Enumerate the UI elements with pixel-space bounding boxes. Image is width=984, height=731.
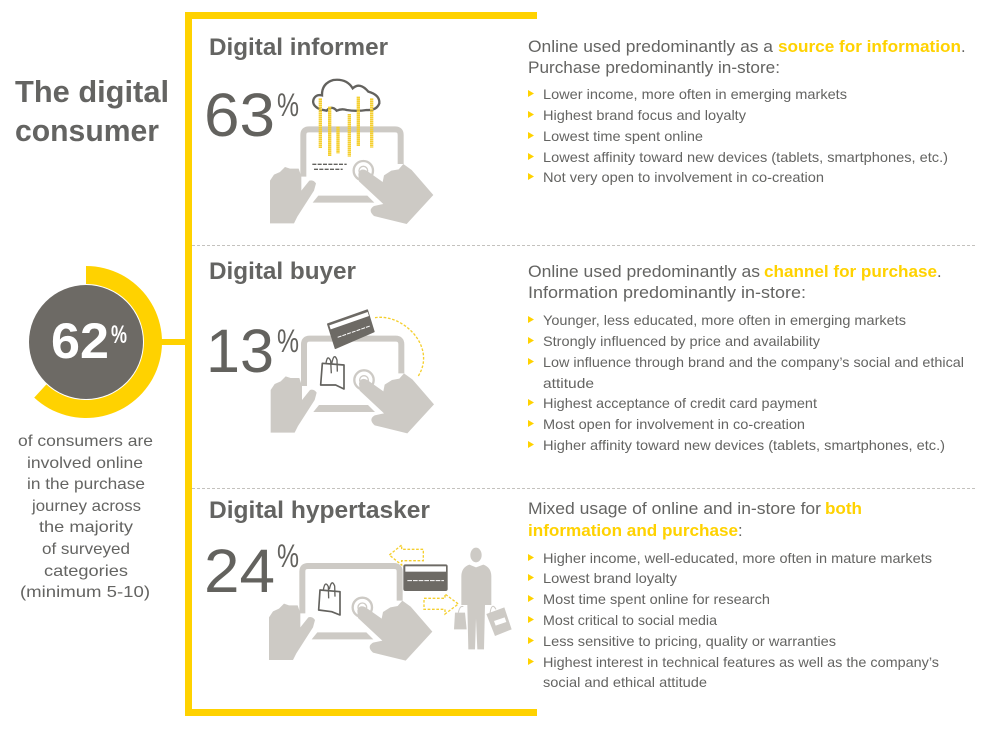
text: hypertasker description: :	[738, 522, 743, 540]
list: hypertasker traits: Most time spent online for research	[543, 591, 770, 607]
text: informer description: source for information	[778, 38, 961, 56]
statistic: 63%: %	[277, 87, 299, 123]
donut chart: 62%: 62	[51, 313, 109, 369]
text: informer description	[528, 38, 966, 77]
donut chart: 62%	[29, 266, 162, 418]
panel: digital buyer	[206, 258, 964, 453]
text: informer description: Purchase predominantly in-store:	[528, 59, 780, 77]
statistic: 13%: %	[277, 323, 299, 359]
heading: digital buyer: Digital buyer	[209, 258, 356, 285]
text: hypertasker description	[528, 500, 862, 540]
statistic: 63%: 63	[204, 81, 275, 149]
title	[15, 74, 169, 148]
statistic: 24%: %	[277, 538, 299, 574]
list: buyer traits: Younger, less educated, more often in emerging markets	[543, 312, 906, 328]
text: informer description: .	[961, 38, 966, 56]
text block: 62% description: (minimum 5-10)	[20, 584, 150, 601]
list: informer traits: Lowest time spent online	[543, 128, 703, 144]
text block: 62% description: of surveyed	[42, 541, 130, 558]
title: The digital	[15, 74, 169, 109]
panel: digital hypertasker	[204, 497, 939, 690]
text block: 62% description: in the purchase	[27, 476, 145, 493]
statistic: 24%: 24	[204, 537, 275, 605]
donut chart: 62%: %	[111, 321, 127, 349]
text block: 62% description	[18, 433, 153, 601]
icon: tablet with card and bag	[271, 310, 434, 433]
text block: 62% description: categories	[44, 563, 128, 580]
text: buyer description: .	[937, 263, 942, 281]
list: informer traits: Not very open to involvement in co-creation	[543, 169, 824, 185]
list: informer traits: Highest brand focus and loyalty	[543, 107, 746, 123]
icon: tablet, card, arrows and shopper	[269, 545, 512, 661]
list: buyer traits: Highest acceptance of credit card payment	[543, 395, 817, 411]
connector from donut to frame	[160, 339, 187, 345]
list: buyer traits: Low influence through brand and the company’s social and ethical	[543, 354, 964, 370]
text: buyer description	[528, 263, 942, 302]
list: hypertasker traits: Higher income, well-educated, more often in mature markets	[543, 550, 932, 566]
list: buyer traits: Higher affinity toward new devices (tablets, smartphones, etc.)	[543, 437, 945, 453]
text: hypertasker description: both	[825, 500, 862, 518]
text: buyer description: channel for purchase	[764, 263, 937, 281]
list: informer traits	[528, 86, 948, 185]
list: hypertasker traits: Less sensitive to pricing, quality or warranties	[543, 633, 836, 649]
heading: digital hypertasker: Digital hypertasker	[209, 497, 430, 524]
list: buyer traits: attitude	[543, 375, 594, 391]
icon: tablet with cloud	[270, 80, 433, 224]
title: consumer	[15, 113, 159, 148]
text block: 62% description: involved online	[27, 455, 143, 472]
heading: digital informer: Digital informer	[209, 34, 388, 61]
text: informer description: Online used predominantly as a	[528, 38, 774, 56]
list: hypertasker traits: Lowest brand loyalty	[543, 570, 677, 586]
text: hypertasker description: information and purchase	[528, 522, 738, 540]
list: hypertasker traits	[528, 550, 939, 690]
text: hypertasker description: Mixed usage of online and in-store for	[528, 500, 822, 518]
list: hypertasker traits: Highest interest in technical features as well as the company’s	[543, 654, 939, 670]
yellow frame	[188, 16, 537, 712]
list: informer traits: Lowest affinity toward new devices (tablets, smartphones, etc.)	[543, 149, 948, 165]
text: buyer description: Information predominantly in-store:	[528, 284, 806, 302]
list: hypertasker traits: Most critical to social media	[543, 612, 717, 628]
list: informer traits: Lower income, more often in emerging markets	[543, 86, 847, 102]
list: hypertasker traits: social and ethical attitude	[543, 674, 707, 690]
list: buyer traits: Most open for involvement in co-creation	[543, 416, 805, 432]
text block: 62% description: journey across	[31, 498, 141, 515]
list: buyer traits: Strongly influenced by price and availability	[543, 333, 820, 349]
panel: digital informer	[204, 34, 966, 224]
list: buyer traits	[528, 312, 964, 453]
statistic: 13%: 13	[206, 317, 274, 385]
text block: 62% description: of consumers are	[18, 433, 153, 450]
text block: 62% description: the majority	[39, 519, 133, 536]
text: buyer description: Online used predominantly as	[528, 263, 760, 281]
